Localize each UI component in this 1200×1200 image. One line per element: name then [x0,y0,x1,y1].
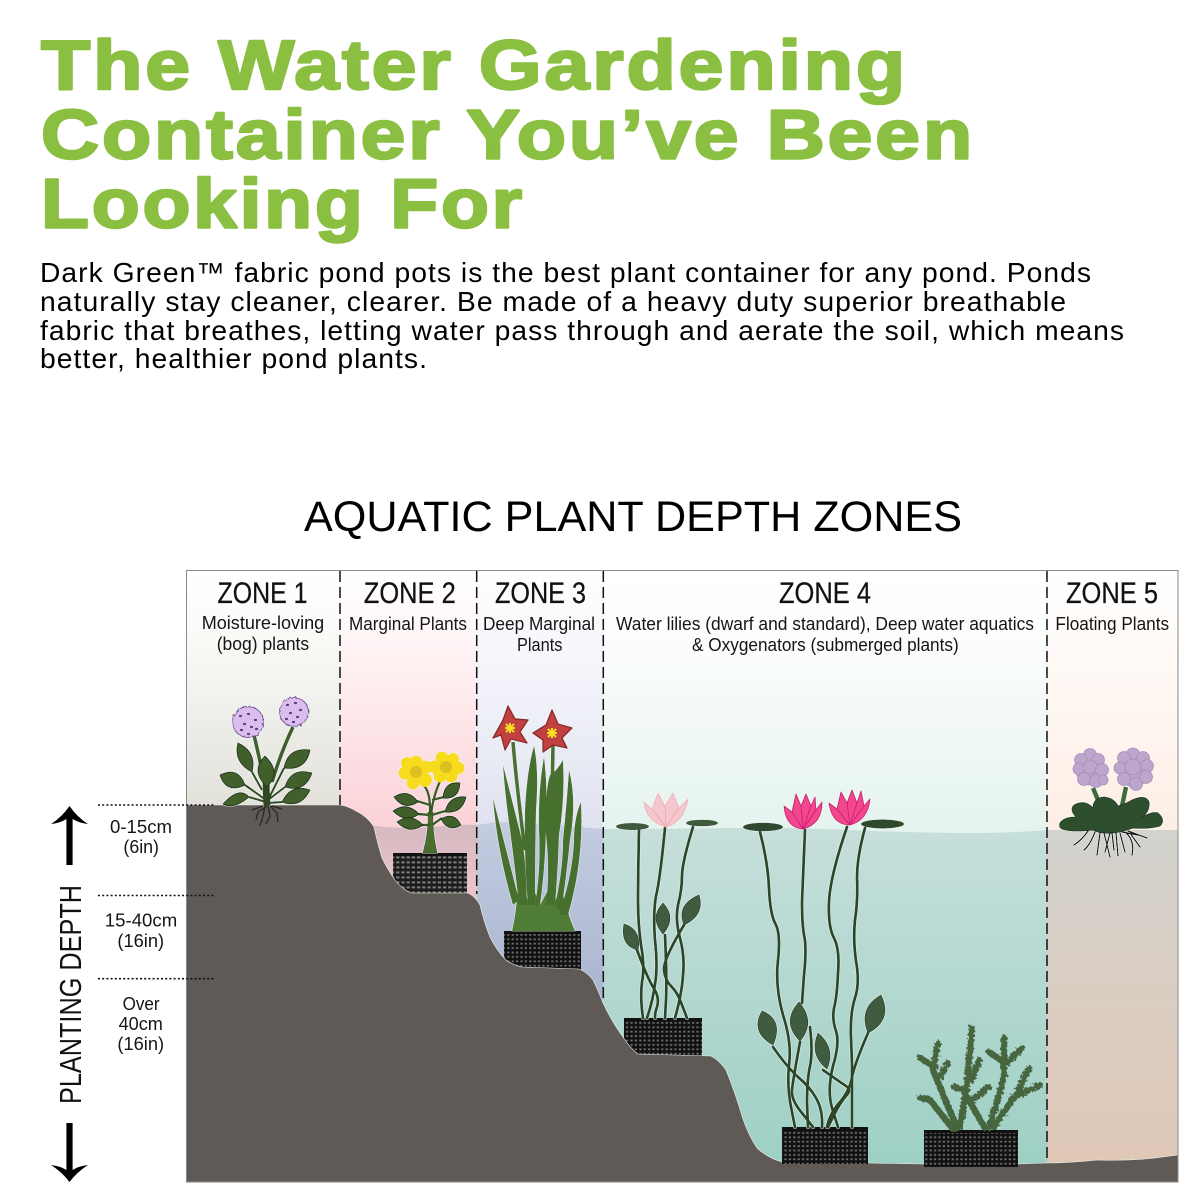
zone 3 label [483,577,595,655]
pot: zone 4 oxygenator [924,1130,1018,1167]
zone 1 label: ZONE 1 [218,577,308,610]
zone 3 label: Deep Marginal [483,613,595,634]
arrow: down [51,1123,88,1182]
intro text block: better, healthier pond plants. [40,343,428,374]
arrow: up [51,806,88,865]
depth label over 40cm [117,994,164,1054]
zone 5 label: Floating Plants [1055,613,1169,634]
zone 4 background [603,570,1047,1170]
intro text block [40,257,1125,374]
depth guide dotted lines [98,805,214,979]
zone 2 label [349,577,467,634]
plant: zone 1 moisture-loving [220,698,312,826]
zone 1 background [186,570,340,810]
plant: dwarf water lily [616,793,718,1018]
pot: zone 2 [393,853,467,894]
zone 1 label [202,577,324,654]
depth label over 40cm: 40cm [119,1014,163,1034]
panel border [186,570,1178,1182]
title: The Water Gardening [41,26,908,104]
depth label 0-15cm [110,817,172,857]
depth label 15-40cm: (16in) [117,931,164,951]
ground slope [186,805,1178,1182]
zone 5 background [1047,570,1178,1170]
zone 5 label: ZONE 5 [1066,577,1158,610]
zone 2 label: ZONE 2 [364,577,456,610]
title: Looking For [41,164,525,242]
title: Container You’ve Been [41,96,975,174]
zone 4 label: ZONE 4 [779,577,871,610]
zone 4 label: Water lilies (dwarf and standard), Deep water aquatics [616,613,1034,634]
depth label over 40cm: Over [123,994,160,1014]
depth label 0-15cm: 0-15cm [110,817,172,837]
intro text block: naturally stay cleaner, clearer. Be made of a heavy duty superior breathable [40,286,1067,317]
depth label 15-40cm: 15-40cm [105,910,177,930]
title [41,26,975,242]
pot: zone 4 dwarf lily [624,1018,702,1056]
zone 3 background [477,570,603,1010]
zone 2 background [340,570,477,900]
intro text block: Dark Green™ fabric pond pots is the best plant container for any pond. Ponds [40,257,1092,288]
chart heading: AQUATIC PLANT DEPTH ZONES [304,493,962,541]
depth label over 40cm: (16in) [117,1034,164,1054]
pot: zone 4 tall lily [782,1127,868,1164]
zone 2 label: Marginal Plants [349,613,467,634]
zone 3 label: ZONE 3 [495,577,586,610]
zone 1 label: Moisture-loving [202,612,324,633]
plant: zone 3 deep marginal [493,706,581,931]
zone 4 label: & Oxygenators (submerged plants) [692,634,959,655]
plant: zone 2 marginal [393,752,466,853]
zone 5 label [1055,577,1169,634]
depth label 15-40cm [105,910,177,951]
depth label 0-15cm: (6in) [123,837,159,857]
zone 4 label [616,577,1034,655]
plant: zone 5 floating [1060,748,1163,857]
plant: oxygenator [920,1028,1040,1129]
plant: standard water lily [743,790,904,1127]
zone 1 label: (bog) plants [217,633,309,654]
pot: zone 3 [504,931,581,970]
planting depth axis label: PLANTING DEPTH [53,885,88,1104]
zone dividers [340,571,1047,1163]
depth zones diagram [51,570,1178,1182]
intro text block: fabric that breathes, letting water pass through and aerate the soil, which means [40,315,1125,346]
zone 3 label: Plants [517,634,562,655]
